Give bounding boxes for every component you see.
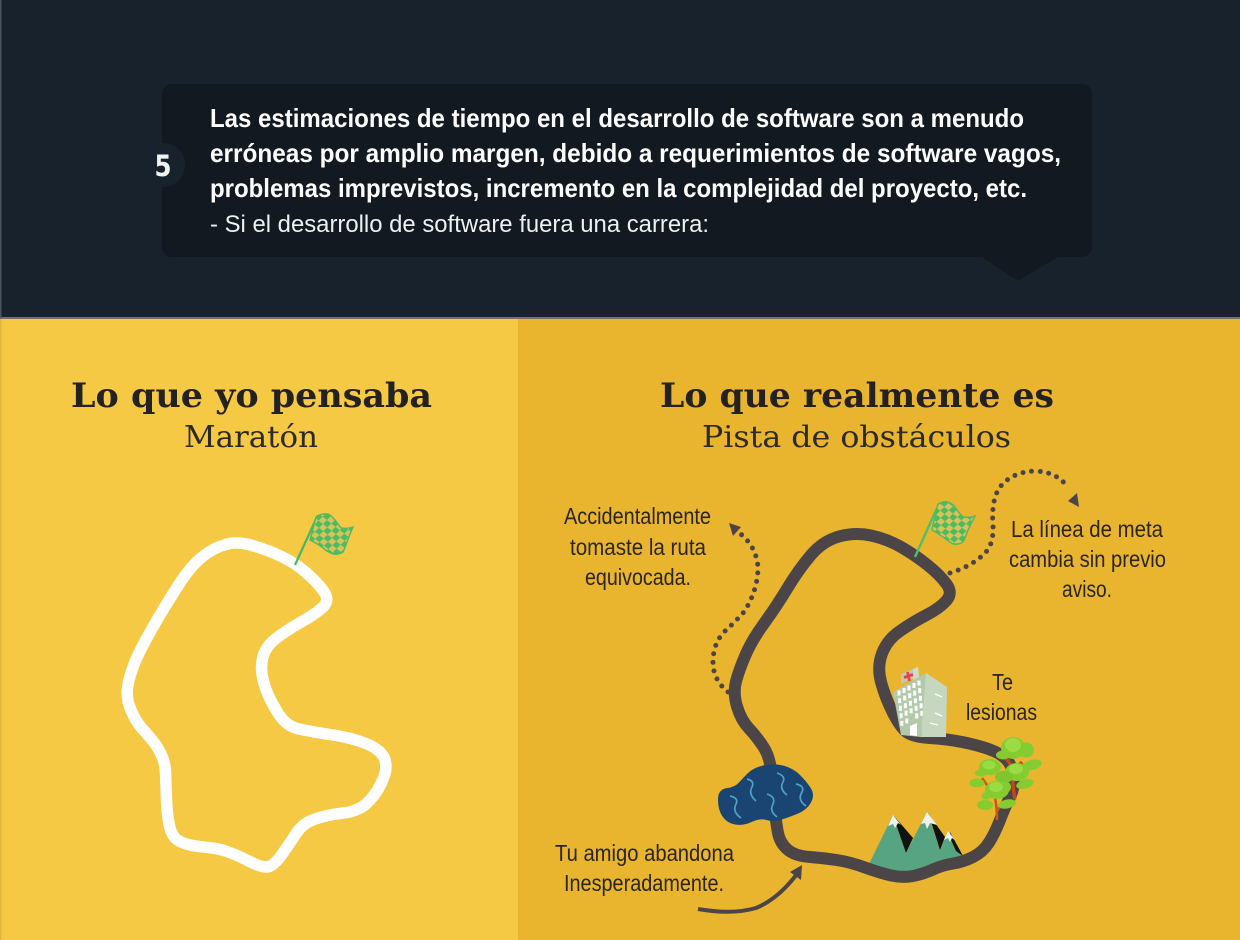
- icon: lake: [718, 764, 813, 825]
- label: injury: [966, 669, 1037, 725]
- label: friend quits: [555, 840, 734, 896]
- icon: finish flag, obstacle course: [915, 502, 975, 557]
- heading: right: [660, 376, 1054, 455]
- label: injury: lesionas: [966, 699, 1037, 725]
- icon: hospital: [893, 667, 947, 737]
- number badge: [141, 143, 185, 187]
- intro text: erróneas por amplio margen, debido a requerimientos de software vagos,: [210, 138, 1061, 168]
- label: friend quits: Inesperadamente.: [564, 870, 724, 896]
- track: obstacle course dark loop: [735, 534, 1014, 877]
- heading: right: Lo que realmente es: [660, 376, 1054, 416]
- arrow: friend quits: [698, 865, 802, 912]
- arrow: dotted finish line moves: [950, 471, 1079, 573]
- label: injury: Te: [992, 669, 1013, 695]
- icon: mountains: [869, 812, 963, 876]
- arrow: dotted wrong route: [713, 523, 758, 692]
- label: finish line moves: aviso.: [1062, 576, 1112, 602]
- label: friend quits: Tu amigo abandona: [555, 840, 734, 866]
- heading: left: [71, 376, 432, 455]
- panel: right amber: [518, 319, 1240, 940]
- number badge: 5: [154, 149, 172, 183]
- heading: right: Pista de obstáculos: [702, 420, 1011, 455]
- label: wrong route: Accidentalmente: [564, 503, 711, 529]
- callout: speech bubble with intro text: [141, 84, 1092, 281]
- icon: finish flag, marathon: [295, 514, 353, 565]
- intro text: Las estimaciones de tiempo en el desarrollo de software son a menudo: [210, 103, 1024, 133]
- track: marathon white loop: [127, 543, 386, 867]
- label: wrong route: equivocada.: [585, 564, 691, 590]
- label: finish line moves: cambia sin previo: [1009, 546, 1166, 572]
- heading: left: Lo que yo pensaba: [71, 376, 432, 416]
- label: finish line moves: [1009, 516, 1166, 602]
- label: finish line moves: La línea de meta: [1011, 516, 1163, 542]
- header background: [0, 0, 1240, 318]
- heading: left: Maratón: [184, 420, 318, 455]
- bubble shape: [162, 84, 1092, 281]
- intro text: - Si el desarrollo de software fuera una carrera:: [210, 211, 709, 238]
- label: wrong route: tomaste la ruta: [570, 534, 706, 560]
- intro text: problemas imprevistos, incremento en la complejidad del proyecto, etc.: [210, 173, 1027, 203]
- intro text: [210, 103, 1061, 238]
- label: wrong route: [564, 503, 711, 590]
- panel: left yellow: [0, 319, 518, 940]
- icon: trees: [970, 737, 1043, 820]
